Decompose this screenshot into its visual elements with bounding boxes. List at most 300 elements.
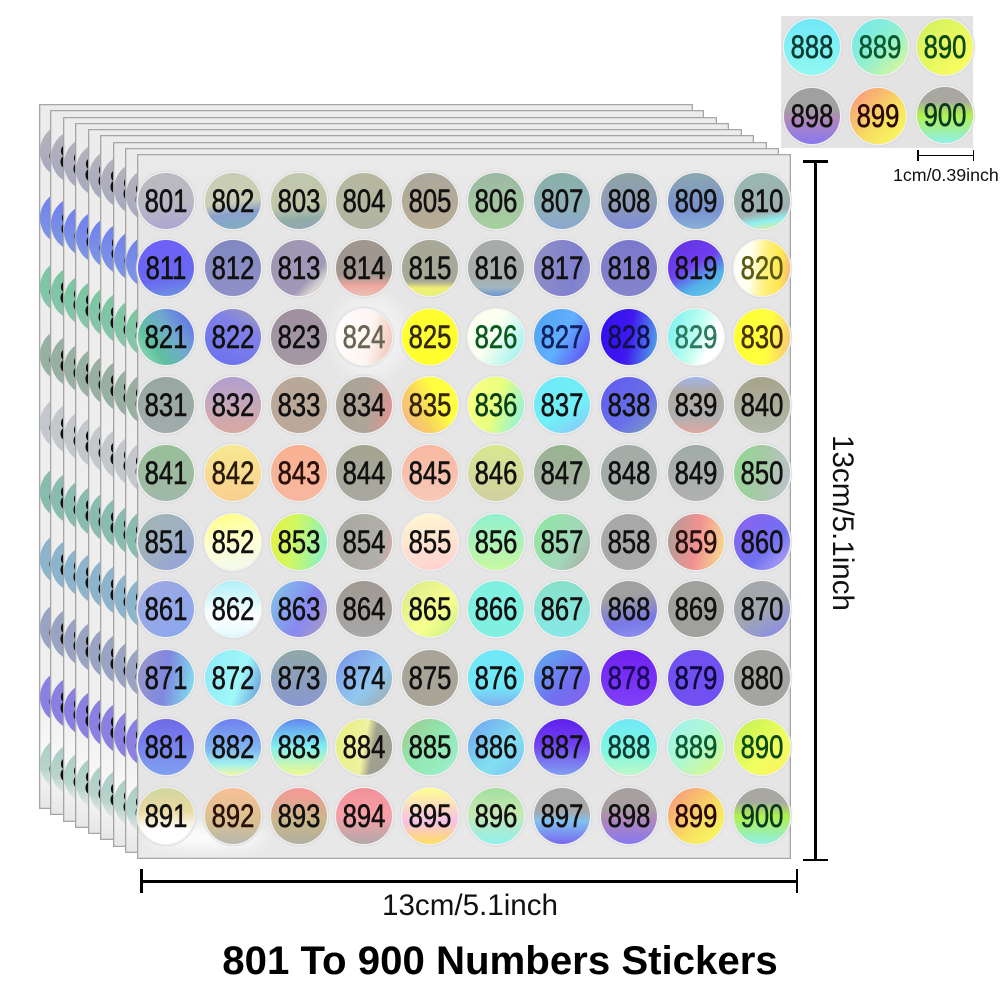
back sheet 3: 841: [72, 418, 115, 454]
sticker 850: 850: [740, 455, 783, 491]
sticker 881: 881: [145, 729, 187, 765]
sticker 893: 893: [277, 798, 320, 834]
sticker 888: 888: [607, 729, 650, 765]
back sheet 6: 811: [110, 230, 151, 266]
sticker 871: [138, 650, 194, 706]
sticker 820: 820: [740, 250, 783, 286]
sticker 869: [668, 581, 724, 637]
back sheet 3: 881: [72, 692, 115, 728]
sticker 884: [336, 719, 392, 775]
back sheet 2: 881: [59, 685, 102, 721]
sticker 869: 869: [674, 591, 717, 627]
sticker 843: [270, 445, 326, 501]
sticker 894: 894: [343, 798, 385, 834]
back sheet 6: 821: [109, 300, 152, 336]
back sheet 8: 841: [134, 449, 177, 485]
sticker 818: 818: [607, 250, 650, 286]
back sheet 4: 841: [84, 424, 127, 460]
back sheet 2: 871: [59, 616, 102, 652]
sticker 808: 808: [607, 183, 650, 219]
sticker 830: [734, 308, 790, 364]
sticker 807: 807: [541, 183, 583, 219]
sticker 845: 845: [409, 455, 451, 491]
back sheet 6: 801: [109, 164, 152, 200]
sticker 871: 871: [145, 660, 187, 696]
sticker 817: [534, 240, 590, 296]
back sheet 5: 871: [97, 635, 140, 671]
sticker 858: 858: [607, 524, 650, 560]
sticker 889: 889: [674, 729, 717, 765]
sticker 885: [402, 719, 458, 775]
sticker 829: [668, 308, 724, 364]
back sheet 1: 831: [49, 336, 91, 372]
back sheet 5: 861: [97, 566, 140, 602]
back sheet 5: 801: [97, 158, 140, 194]
sticker 860: 860: [740, 524, 783, 560]
sticker 852: [204, 514, 260, 570]
back sheet 1: 881: [49, 679, 91, 715]
sticker 834: 834: [343, 386, 385, 422]
back sheet 6: 841: [109, 436, 152, 472]
sticker 856: 856: [475, 524, 517, 560]
sticker 816: [468, 240, 524, 296]
back sheet 2: 861: [59, 547, 102, 583]
sticker 887: 887: [541, 729, 583, 765]
sticker 873: 873: [277, 660, 320, 696]
sticker 814: [336, 240, 392, 296]
back sheet 3: [62, 117, 716, 822]
back sheet 4: 821: [84, 288, 127, 324]
sticker 887: [534, 719, 590, 775]
sticker 899: 899: [674, 798, 717, 834]
inset sticker 900: [917, 87, 973, 143]
back sheet 7: 821: [122, 306, 165, 342]
sticker 825: 825: [409, 318, 451, 354]
sticker 883: [270, 719, 326, 775]
sticker 841: [138, 445, 194, 501]
sticker 877: [534, 650, 590, 706]
sticker 849: [668, 445, 724, 501]
scale label: 1cm/0.39inch: 1cm/0.39inch: [893, 165, 999, 185]
sticker 858: [600, 514, 656, 570]
back sheet 2: [50, 110, 704, 815]
back sheet 5: 821: [97, 294, 140, 330]
sticker 855: [402, 514, 458, 570]
sticker 854: [336, 514, 392, 570]
scale bar: 1cm: [917, 154, 974, 156]
back sheet 1: 851: [49, 474, 91, 510]
dimension arrow: vertical height: [814, 160, 816, 861]
back sheet 5: 831: [97, 362, 140, 398]
back sheet 7: 831: [122, 374, 165, 410]
sticker 884: 884: [343, 729, 385, 765]
sticker 892: 892: [211, 798, 254, 834]
back sheet 6: 891: [109, 777, 152, 813]
back sheet 1: 871: [49, 610, 91, 646]
sticker 820: [734, 240, 790, 296]
dimension arrow: horizontal width: [141, 880, 798, 882]
sticker 885: 885: [409, 729, 451, 765]
back sheet 6: 861: [109, 572, 152, 608]
sticker 809: [668, 173, 724, 229]
sticker 834: [336, 376, 392, 432]
sticker 898: [600, 788, 656, 844]
back sheet 1: 841: [49, 405, 91, 441]
sticker 853: [270, 514, 326, 570]
sticker 897: 897: [541, 798, 583, 834]
panel: front sticker sheet 801 to 900: [137, 154, 791, 859]
back sheet 8: 891: [134, 790, 177, 826]
back sheet 8: 831: [134, 380, 177, 416]
back sheet 7: 811: [123, 238, 164, 274]
inset sticker 889: [852, 19, 908, 75]
sticker 828: [600, 308, 656, 364]
sticker 821: [138, 308, 194, 364]
sticker 855: 855: [409, 524, 451, 560]
sticker 898: 898: [607, 798, 650, 834]
sticker 868: 868: [607, 591, 650, 627]
sticker 824: 824: [343, 318, 385, 354]
sticker 900: [734, 788, 790, 844]
sticker 880: [734, 650, 790, 706]
sticker 806: [468, 173, 524, 229]
inset sticker 889: 889: [859, 29, 901, 65]
back sheet 5: 881: [97, 704, 140, 740]
sticker 850: [734, 445, 790, 501]
sticker 888: [600, 719, 656, 775]
back sheet 4: 801: [84, 152, 127, 188]
back sheet 2: 891: [59, 752, 102, 788]
sticker 837: [534, 376, 590, 432]
back sheet 8: 881: [134, 723, 177, 759]
sticker 851: [138, 514, 194, 570]
sticker 872: 872: [211, 660, 254, 696]
sticker 848: [600, 445, 656, 501]
back sheet 2: 811: [60, 206, 101, 242]
sticker 831: [138, 376, 194, 432]
sticker 817: 817: [541, 250, 583, 286]
sticker 818: [600, 240, 656, 296]
sticker 859: 859: [674, 524, 717, 560]
sticker 847: [534, 445, 590, 501]
sticker 852: 852: [211, 524, 254, 560]
sticker 804: [336, 173, 392, 229]
back sheet 3: 811: [73, 212, 114, 248]
sticker 826: [468, 308, 524, 364]
sticker 826: 826: [475, 318, 517, 354]
sticker 876: 876: [475, 660, 517, 696]
sticker 812: [204, 240, 260, 296]
sticker 883: 883: [277, 729, 320, 765]
sticker 899: [668, 788, 724, 844]
sticker 824: [336, 308, 392, 364]
back sheet 7: [112, 142, 766, 847]
sticker 819: [668, 240, 724, 296]
back sheet 4: [74, 123, 728, 828]
inset sticker 888: [784, 19, 840, 75]
sticker 802: 802: [211, 183, 254, 219]
back sheet 5: 891: [97, 771, 140, 807]
back sheet 4: 831: [84, 356, 127, 392]
back sheet 8: 801: [134, 177, 177, 213]
sticker 892: [204, 788, 260, 844]
inset sticker 900: 900: [924, 97, 966, 133]
back sheet 4: 891: [84, 765, 127, 801]
back sheet 7: 851: [122, 512, 165, 548]
sticker 891: 891: [145, 798, 187, 834]
sticker 854: 854: [343, 524, 385, 560]
back sheet 4: 871: [84, 629, 127, 665]
sticker 874: [336, 650, 392, 706]
sticker 849: 849: [674, 455, 717, 491]
back sheet 6: 831: [109, 368, 152, 404]
sticker 842: 842: [211, 455, 254, 491]
back sheet 8: 861: [134, 585, 177, 621]
inset sticker 888: 888: [791, 29, 833, 65]
back sheet 7: 871: [122, 648, 165, 684]
back sheet 1: 821: [49, 268, 91, 304]
sticker 864: [336, 581, 392, 637]
title: 801 To 900 Numbers Stickers: [222, 938, 778, 983]
sticker 896: [468, 788, 524, 844]
sticker 843: 843: [277, 455, 320, 491]
dimension label: horizontal 13cm/5.1inch: 13cm/5.1inch: [382, 889, 558, 922]
back sheet 5: 851: [97, 498, 140, 534]
sticker 845: [402, 445, 458, 501]
panel: close-up inset of stickers 888 to 900: [781, 16, 973, 148]
sticker 816: 816: [475, 250, 517, 286]
sticker 803: [270, 173, 326, 229]
sticker 873: [270, 650, 326, 706]
back sheet 7: 861: [122, 579, 165, 615]
sticker 859: [668, 514, 724, 570]
sticker 897: [534, 788, 590, 844]
back sheet 7: 841: [122, 443, 165, 479]
sticker 878: 878: [607, 660, 650, 696]
back sheet 3: 821: [72, 282, 115, 318]
back sheet 3: 871: [72, 623, 115, 659]
back sheet 3: 831: [72, 350, 115, 386]
sticker 875: 875: [409, 660, 451, 696]
sticker 857: [534, 514, 590, 570]
inset sticker 898: [784, 88, 840, 144]
sticker 805: 805: [409, 183, 451, 219]
sticker 862: [204, 581, 260, 637]
sticker 863: 863: [277, 591, 320, 627]
back sheet 6: 881: [109, 710, 152, 746]
sticker 890: 890: [740, 729, 783, 765]
sticker 844: [336, 445, 392, 501]
sticker 801: 801: [145, 183, 187, 219]
sticker 848: 848: [607, 455, 650, 491]
inset sticker 898: 898: [791, 98, 833, 134]
sticker 846: [468, 445, 524, 501]
sticker 823: [270, 308, 326, 364]
sticker 836: [468, 376, 524, 432]
back sheet 2: 801: [59, 139, 102, 175]
sticker 809: 809: [674, 183, 717, 219]
sticker 838: 838: [607, 386, 650, 422]
sticker 827: 827: [541, 318, 583, 354]
back sheet 2: 821: [59, 274, 102, 310]
sticker 828: 828: [607, 318, 650, 354]
sticker 866: 866: [475, 591, 517, 627]
sticker 875: [402, 650, 458, 706]
inset sticker 899: 899: [857, 98, 899, 134]
sticker 882: 882: [211, 729, 254, 765]
back sheet 3: 851: [72, 486, 115, 522]
sticker 833: [270, 376, 326, 432]
sticker 841: 841: [145, 455, 187, 491]
back sheet 5: 841: [97, 430, 140, 466]
sticker 881: [138, 719, 194, 775]
back sheet 5: [88, 129, 742, 834]
sticker 891: [138, 788, 194, 844]
sticker 832: 832: [211, 386, 254, 422]
back sheet 7: 801: [122, 171, 165, 207]
back sheet 7: 881: [122, 717, 165, 753]
sticker 822: 822: [211, 318, 254, 354]
sticker 879: [668, 650, 724, 706]
back sheet 2: 831: [59, 342, 102, 378]
sticker 839: 839: [674, 386, 717, 422]
sticker 836: 836: [475, 386, 517, 422]
back sheet 8: 821: [134, 312, 177, 348]
sticker 890: [734, 719, 790, 775]
sticker 808: [600, 173, 656, 229]
sticker 807: [534, 173, 590, 229]
back sheet 1: 891: [49, 746, 91, 782]
sticker 835: [402, 376, 458, 432]
sticker 815: [402, 240, 458, 296]
sticker 866: [468, 581, 524, 637]
sticker 814: 814: [343, 250, 385, 286]
sticker 856: [468, 514, 524, 570]
sticker 821: 821: [145, 318, 187, 354]
back sheet 3: 861: [72, 554, 115, 590]
sticker 833: 833: [277, 386, 320, 422]
back sheet 8: 811: [135, 244, 176, 280]
sticker 846: 846: [475, 455, 517, 491]
inset sticker 890: [917, 19, 973, 75]
dimension label: vertical 13cm/5.1inch: 13cm/5.1inch: [826, 435, 859, 611]
back sheet 1: 801: [49, 133, 91, 169]
sticker 870: [734, 581, 790, 637]
back sheet 6: 851: [109, 504, 152, 540]
sticker 867: 867: [541, 591, 583, 627]
sticker 827: [534, 308, 590, 364]
sticker 896: 896: [475, 798, 517, 834]
sticker 857: 857: [541, 524, 583, 560]
sticker 870: 870: [740, 591, 783, 627]
back sheet 3: 891: [72, 759, 115, 795]
sticker 840: 840: [740, 386, 783, 422]
sticker 813: [270, 240, 326, 296]
sticker 801: [138, 173, 194, 229]
sticker 804: 804: [343, 183, 385, 219]
sticker 861: [138, 581, 194, 637]
sticker 878: [600, 650, 656, 706]
sticker 812: 812: [211, 250, 254, 286]
sticker 889: [668, 719, 724, 775]
sticker 867: [534, 581, 590, 637]
sticker 829: 829: [674, 318, 717, 354]
sticker 810: [734, 173, 790, 229]
sticker 877: 877: [541, 660, 583, 696]
back sheet 8: 871: [134, 654, 177, 690]
sticker 851: 851: [145, 524, 187, 560]
back sheet 8: 851: [134, 518, 177, 554]
back sheet 4: 851: [84, 492, 127, 528]
sticker 806: 806: [475, 183, 517, 219]
sticker 837: 837: [541, 386, 583, 422]
sticker 872: [204, 650, 260, 706]
sticker 886: 886: [475, 729, 517, 765]
sticker 863: [270, 581, 326, 637]
sticker 805: [402, 173, 458, 229]
sticker 838: [600, 376, 656, 432]
sticker 880: 880: [740, 660, 783, 696]
sticker 802: [204, 173, 260, 229]
back sheet 3: 801: [72, 146, 115, 182]
back sheet 2: 841: [59, 411, 102, 447]
sticker 823: 823: [277, 318, 320, 354]
sticker 900: 900: [740, 798, 783, 834]
sticker 803: 803: [277, 183, 320, 219]
sticker 894: [336, 788, 392, 844]
back sheet 1: 811: [50, 200, 90, 236]
sticker 882: [204, 719, 260, 775]
sticker 844: 844: [343, 455, 385, 491]
sticker 864: 864: [343, 591, 385, 627]
sticker 861: 861: [145, 591, 187, 627]
sticker 815: 815: [409, 250, 451, 286]
sticker 830: 830: [740, 318, 783, 354]
back sheet 7: 891: [122, 784, 165, 820]
sticker 868: [600, 581, 656, 637]
back sheet 1: 861: [49, 541, 91, 577]
back sheet 6: 871: [109, 641, 152, 677]
back sheet 4: 811: [85, 218, 126, 254]
sticker 839: [668, 376, 724, 432]
back sheet 4: 881: [84, 698, 127, 734]
sticker 865: [402, 581, 458, 637]
sticker 879: 879: [674, 660, 717, 696]
back sheet 1: [39, 104, 693, 809]
sticker 853: 853: [277, 524, 320, 560]
back sheet 2: 851: [59, 480, 102, 516]
back sheet 4: 861: [84, 560, 127, 596]
sticker 847: 847: [541, 455, 583, 491]
sticker 811: [138, 240, 194, 296]
sticker 831: 831: [145, 386, 187, 422]
back sheet 5: 811: [98, 224, 139, 260]
sticker 840: [734, 376, 790, 432]
inset sticker 899: [850, 88, 906, 144]
sticker 835: 835: [409, 386, 451, 422]
sticker 862: 862: [211, 591, 254, 627]
sticker 865: 865: [409, 591, 451, 627]
sticker 811: 811: [146, 250, 186, 286]
sticker 842: [204, 445, 260, 501]
sticker 832: [204, 376, 260, 432]
back sheet 6: [100, 135, 754, 840]
sticker 860: [734, 514, 790, 570]
sticker 876: [468, 650, 524, 706]
sticker 810: 810: [740, 183, 783, 219]
sticker 819: 819: [674, 250, 717, 286]
sticker 895: 895: [409, 798, 451, 834]
